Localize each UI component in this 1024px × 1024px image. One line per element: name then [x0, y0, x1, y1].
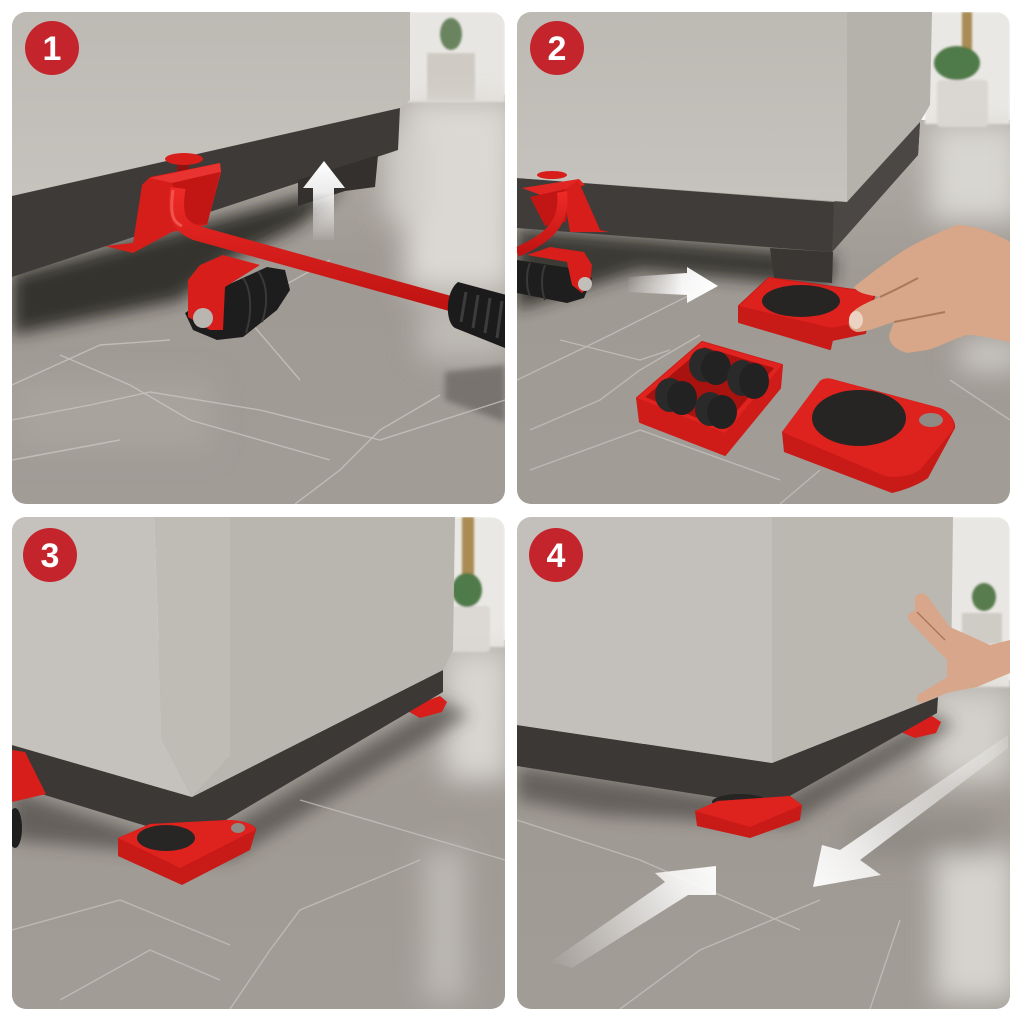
panel: step 1 lift with lever	[12, 12, 515, 504]
badge: step 1	[25, 21, 79, 75]
sofa left face	[517, 517, 772, 763]
floor shadow	[12, 185, 345, 335]
arrow toward furniture	[550, 866, 716, 968]
potted plant	[934, 12, 988, 127]
potted plant	[427, 18, 475, 101]
marble veins	[517, 290, 1010, 504]
hand pushing	[908, 594, 1010, 703]
red plate held by hand	[739, 278, 875, 349]
up arrow	[303, 161, 345, 240]
sofa foot	[770, 248, 833, 283]
sofa front left face	[12, 517, 192, 797]
far slider	[896, 716, 941, 738]
floor	[517, 680, 1010, 1009]
background wall	[925, 12, 1010, 124]
badge: step 4	[529, 528, 583, 582]
sofa foot	[298, 155, 378, 206]
front slider	[695, 794, 802, 838]
floor	[12, 640, 505, 1009]
badge: step 2	[530, 21, 584, 75]
grip reflection	[445, 365, 505, 422]
sofa right face	[772, 517, 953, 763]
badge: step 3: 3	[41, 537, 59, 575]
arrow pushing forward	[813, 735, 1008, 887]
sofa base	[517, 697, 938, 806]
floor	[12, 95, 505, 504]
wheel edge	[8, 808, 22, 848]
roller	[727, 360, 769, 399]
lifter tool	[517, 171, 609, 303]
sofa base	[12, 670, 443, 840]
marble veins	[12, 260, 505, 504]
background wall	[400, 12, 505, 102]
red tray with rollers	[637, 342, 782, 455]
floor shadow	[517, 715, 955, 825]
badge: step 1: 1	[43, 30, 61, 68]
floor shadow	[517, 228, 835, 310]
far slider	[404, 696, 447, 718]
floor reflections	[930, 125, 1020, 370]
marble veins	[12, 800, 505, 1009]
red plate with round pad	[782, 378, 955, 493]
floor shadow	[12, 700, 470, 860]
sofa corner strip	[154, 517, 230, 797]
sofa base side	[832, 122, 920, 252]
front slider	[118, 820, 256, 885]
floor	[517, 120, 1010, 504]
panel: step 4 push furniture	[517, 517, 1015, 1009]
floor reflections	[34, 102, 505, 428]
roller	[689, 348, 731, 385]
hand	[849, 225, 1010, 353]
badge: step 3	[23, 528, 77, 582]
floor reflections	[850, 690, 1015, 1000]
potted plant	[962, 583, 1002, 644]
lever arm	[177, 188, 452, 304]
badge: step 4: 4	[547, 537, 566, 575]
wheel unit	[185, 267, 290, 340]
panel: step 3 lowered on sliders	[8, 517, 510, 1009]
background wall	[945, 517, 1010, 687]
marble veins	[517, 820, 900, 1009]
bracket	[105, 163, 221, 253]
right arrow	[628, 267, 718, 303]
sofa body front	[517, 12, 847, 202]
sofa body side	[847, 12, 932, 202]
roller	[695, 392, 737, 429]
sofa right face	[192, 517, 455, 797]
pin	[165, 153, 203, 172]
panel: step 2 place sliders	[517, 12, 1020, 504]
sofa body	[12, 12, 410, 196]
sofa base	[517, 122, 920, 252]
left slider edge	[12, 750, 46, 802]
sofa base	[12, 107, 400, 277]
potted plant	[449, 517, 490, 652]
lever tool	[105, 153, 510, 350]
black grip	[448, 282, 505, 348]
badge: step 2: 2	[548, 30, 566, 68]
roller	[655, 378, 697, 415]
background wall	[450, 517, 505, 647]
floor reflections	[425, 650, 510, 1000]
